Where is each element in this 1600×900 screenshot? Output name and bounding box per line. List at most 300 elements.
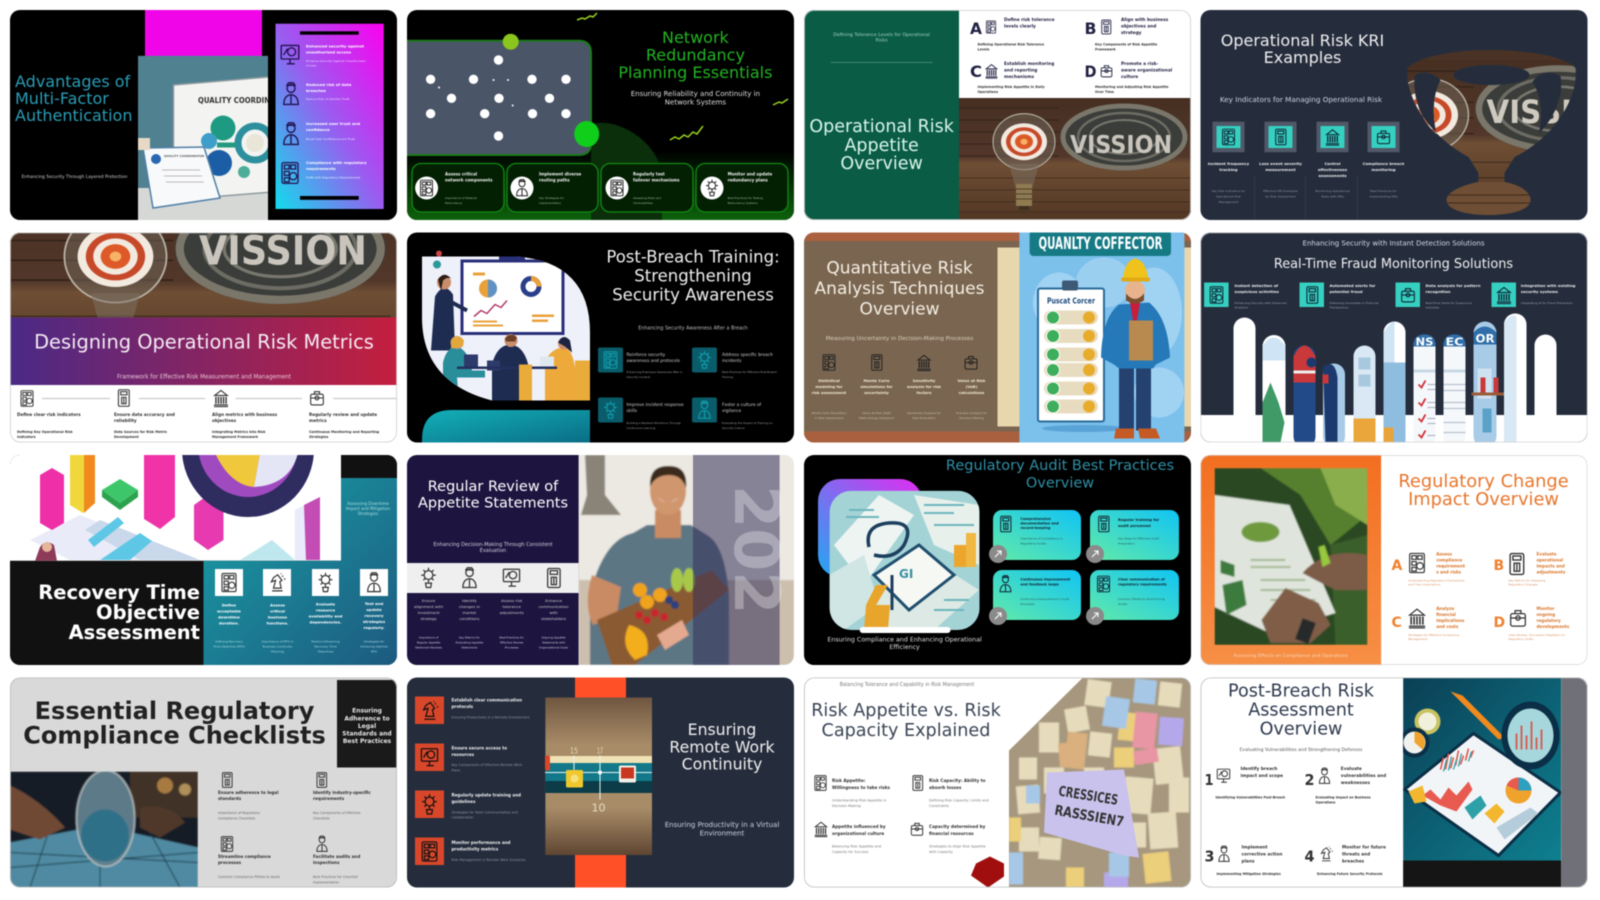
feature 2: potential fraud xyxy=(1330,289,1363,294)
statement 1: Statement Reviews xyxy=(415,646,443,650)
technique 1: risk assessment xyxy=(812,390,846,395)
metric 2: Development xyxy=(114,435,139,439)
technique 3: Sensitivity xyxy=(913,378,936,383)
indicator: incident frequency xyxy=(1208,122,1250,204)
gradient list panel xyxy=(276,24,384,209)
title: Post-Breach Risk xyxy=(1228,682,1375,702)
statement 3: Processes xyxy=(505,646,519,650)
step: test: Vulnerabilities xyxy=(633,201,653,205)
step: test: Assessing Risks and xyxy=(633,196,661,200)
step 2: 2 xyxy=(1304,771,1314,789)
impact C: implications xyxy=(1436,618,1465,623)
step 1: acceptable xyxy=(217,608,241,614)
orange bands xyxy=(804,232,1191,442)
step 4: regularly. xyxy=(364,625,385,630)
title band: Framework for Effective Risk Measurement and Management xyxy=(117,374,292,380)
white caption bar xyxy=(860,627,950,633)
note: lavender sign: RASSSIEN7 xyxy=(1053,803,1125,831)
point 4: vigilance xyxy=(722,408,742,414)
check 2: Identify industry-specific xyxy=(313,790,371,795)
item: compliance: Compliance with regulatory xyxy=(306,160,367,165)
title: Analysis Techniques xyxy=(815,279,985,299)
impact B: Regulatory Changes xyxy=(1508,582,1538,586)
concept 1: Risk Appetite: xyxy=(832,778,866,783)
illustration: team meeting xyxy=(422,250,590,400)
indicator: loss event xyxy=(1259,122,1302,198)
item: increased trust: Boost User Confidence and Trust xyxy=(306,137,356,141)
subtitle: Enhancing Decision-Making Through Consistent xyxy=(433,542,553,548)
impact B: operational xyxy=(1536,558,1564,562)
title: Planning Essentials xyxy=(618,63,772,82)
step 3: dependencies. xyxy=(310,620,342,624)
feature 4: Integration with existing xyxy=(1521,283,1576,288)
step 1: Identify breach xyxy=(1240,766,1277,772)
illustration: isometric bars xyxy=(10,381,341,561)
metric 3: Align metrics with business xyxy=(212,412,278,417)
practice 2: Regular training for xyxy=(1118,518,1159,522)
item C: Implementing Risk Appetite in Daily xyxy=(978,85,1045,89)
feature 3: Activities xyxy=(1426,306,1440,310)
step 3: 3 xyxy=(1204,848,1214,866)
subtitle: Evaluation xyxy=(480,548,506,554)
green node xyxy=(574,121,599,147)
impact A: A xyxy=(1392,558,1402,574)
title: Real-Time Fraud Monitoring Solutions xyxy=(1274,257,1513,272)
impact D: Case Studies: Successful Adaptation to xyxy=(1508,633,1565,637)
step: implement xyxy=(507,164,598,212)
orange panel xyxy=(1200,455,1381,665)
practice 2: audit personnel xyxy=(1118,524,1151,528)
metric 4 xyxy=(309,392,380,439)
concept 1 xyxy=(815,776,891,808)
title: Assessment xyxy=(1248,700,1354,720)
practice 3 xyxy=(993,570,1081,620)
feature 4: Integrating AI for Fraud Prevention xyxy=(1521,301,1573,305)
impact D: regulatory xyxy=(1536,618,1561,623)
item: compliance xyxy=(282,160,367,183)
concept 4: Strategies to Align Risk Appetite xyxy=(929,844,986,848)
step: assess: Assess critical xyxy=(445,172,478,176)
technique 2: Methodology Explained xyxy=(859,416,894,420)
step 3: Implement xyxy=(1242,844,1268,850)
impact A: Assess xyxy=(1436,552,1452,556)
practice 3: and feedback loops xyxy=(1020,582,1059,586)
concept 2: Constraints xyxy=(929,804,949,808)
check 4 xyxy=(313,836,360,884)
step: assess: Redundancy xyxy=(445,201,463,205)
subtitle: Environment xyxy=(700,830,745,838)
metric 3 xyxy=(212,390,278,439)
subtitle: Key Indicators for Managing Operational Risk xyxy=(1220,95,1383,104)
concept 3: Balancing Risk Appetite and xyxy=(832,844,881,848)
impact C: and costs xyxy=(1436,624,1459,629)
impact B xyxy=(1494,552,1566,586)
point 3: Building a Resilient Workforce Through xyxy=(626,421,681,425)
subtitle: Ensuring Reliability and Continuity in xyxy=(631,90,760,98)
slide: Post-Breach Training xyxy=(407,232,794,442)
title: Network xyxy=(662,28,730,47)
metric 2 xyxy=(114,390,175,439)
technique 4: (VaR) xyxy=(966,384,978,389)
practice 1 xyxy=(415,696,530,724)
practice 1: Comprehensive xyxy=(1020,517,1052,521)
point 2 xyxy=(692,348,777,379)
statement 2: market xyxy=(462,610,477,615)
practice 3: Regularly update training and xyxy=(452,792,521,798)
statement 2: Identify xyxy=(462,598,477,603)
gray strip xyxy=(1561,678,1588,888)
practice 1: protocols xyxy=(452,704,474,709)
check 1: standards xyxy=(218,796,242,801)
step: test: failover mechanisms xyxy=(633,178,680,182)
step: monitor: Best Practices for Testing xyxy=(728,196,763,200)
item: enhanced security: unauthorized access xyxy=(306,50,352,54)
white floor xyxy=(1200,415,1588,442)
metric 2: reliability xyxy=(114,418,137,423)
slide: Recovery Time Objective Assessment xyxy=(10,381,397,665)
item A: A xyxy=(970,19,983,38)
step 4: breaches xyxy=(1342,858,1365,864)
item A: Levels xyxy=(978,48,989,52)
practice 1: Regulatory Audits xyxy=(1020,542,1047,546)
photo: quality coordination board: QUALITY COORDIN xyxy=(198,96,270,105)
feature 4 xyxy=(1492,282,1576,307)
practice 4: Monitor performance and xyxy=(452,840,511,845)
title: Overview xyxy=(1260,720,1342,740)
point 4: Foster a culture of xyxy=(722,402,762,408)
impact A xyxy=(1392,552,1465,586)
technique 1: modeling for xyxy=(815,384,843,389)
technique 4: calculations xyxy=(959,390,985,395)
indicator: control: effectiveness xyxy=(1318,167,1348,172)
point 4: Security Culture xyxy=(722,426,745,430)
practice 3: Collaboration xyxy=(452,816,473,820)
metric 3: objectives xyxy=(212,418,237,423)
concept 3 xyxy=(815,822,886,854)
illustration: inspector with checklist: Puscat Corcer xyxy=(1047,296,1095,306)
item D: Over Time xyxy=(1095,90,1115,94)
technique 1: Monte Carlo Simulation xyxy=(811,411,847,415)
item D: Promote a risk- xyxy=(1121,61,1159,67)
practice 4 xyxy=(1090,570,1179,620)
step 2: Business Continuity xyxy=(263,644,293,648)
practice 2: Key Components of Effective Remote Work xyxy=(452,763,522,767)
concept 3: Capacity for Success xyxy=(832,850,869,854)
title: Objective xyxy=(96,601,200,624)
feature 1: Enhancing Security with Advanced xyxy=(1234,301,1287,305)
practice 4: Risk Management in Remote Work Scenarios xyxy=(452,858,526,862)
photo: hands holding report xyxy=(1214,468,1368,645)
title: Regulatory Change xyxy=(1398,471,1569,492)
step 4 xyxy=(360,569,388,654)
item B: objectives and xyxy=(1121,24,1156,30)
title: Continuity xyxy=(682,754,762,774)
concept 3: organizational culture xyxy=(832,831,884,836)
statement 1: Importance of xyxy=(419,636,439,640)
indicator: compliance: Compliance breach xyxy=(1363,161,1405,166)
statement 1: strategy xyxy=(420,616,437,621)
slide: Post-Breach Risk Assessment Overview xyxy=(1200,678,1588,888)
indicator: loss event: measurement xyxy=(1265,167,1296,172)
technique 1: Statistical xyxy=(818,378,840,383)
step: monitor xyxy=(696,164,788,212)
step 3: Recovery Time xyxy=(314,644,337,648)
title: Security Awareness xyxy=(612,286,774,304)
item: increased trust: Increased user trust and xyxy=(306,121,360,126)
technique 3: analysis for risk xyxy=(907,384,942,389)
slide: Quantitative Risk Analysis Techniques xyxy=(804,230,1191,442)
item: reduced risk: Reduce Risk of Identity Theft xyxy=(306,97,350,101)
practice 4 xyxy=(415,838,526,865)
black subtitle box: Adherence to xyxy=(344,716,390,722)
feature 2 xyxy=(1300,282,1379,310)
indicator: control: Control xyxy=(1324,161,1341,166)
practice 4: regulatory requirements xyxy=(1118,582,1167,586)
photo: quality coordination board xyxy=(138,56,272,220)
indicator: control: Monitoring Operational xyxy=(1315,189,1350,193)
item: enhanced security: Access xyxy=(306,64,317,68)
item: reduced risk: Reduced risk of data xyxy=(306,82,352,87)
impact A: Understanding Regulatory Frameworks xyxy=(1408,578,1465,582)
point 1: Security Incident xyxy=(626,375,651,379)
statement 1: Regular Appetite xyxy=(417,640,441,644)
step 1: impact and scope xyxy=(1240,773,1283,779)
concept 2: Risk Capacity: Ability to xyxy=(929,778,986,783)
technique 2: Monte Carlo xyxy=(864,378,890,383)
trophy photo xyxy=(1407,50,1576,216)
feature 2: Automated alerts for xyxy=(1330,283,1376,288)
point 2: incidents xyxy=(722,358,742,364)
cream panel xyxy=(998,248,1191,426)
metric 1: Defining Key Operational Risk xyxy=(17,430,73,434)
impact D: Monitor xyxy=(1536,606,1554,611)
step 3: resource xyxy=(316,608,335,612)
step 1 xyxy=(212,569,245,648)
item D: Monitoring and Adjusting Risk Appetite xyxy=(1095,85,1169,89)
concept 2 xyxy=(913,776,989,808)
step 4: update xyxy=(366,607,382,612)
slide: Network Redundancy Planning Essentials xyxy=(403,10,794,220)
subtitle: Network Systems xyxy=(665,98,726,106)
title band: Designing Operational Risk Metrics xyxy=(34,330,374,354)
impact A: and Their Implications xyxy=(1408,582,1441,586)
technique 2 xyxy=(859,355,894,420)
item: increased trust xyxy=(284,121,360,144)
step 1: 1 xyxy=(1204,771,1214,789)
point 3 xyxy=(598,398,684,430)
indicator: incident frequency: Key Risk Indicators for xyxy=(1212,189,1246,193)
step 2: functions. xyxy=(267,620,289,626)
title: Impact Overview xyxy=(1408,489,1559,510)
statement 4: communication xyxy=(539,604,569,609)
statement 3: tolerance xyxy=(503,604,521,609)
point 3: Continuous Learning xyxy=(626,426,656,430)
photo: vision banner: VISSION xyxy=(199,228,367,274)
statement 3: Effective Review xyxy=(500,640,524,644)
technique 3: Sensitivity Analysis for xyxy=(907,411,942,415)
step 1: Time Objective (RTO) xyxy=(212,644,245,648)
indicator: incident frequency: tracking xyxy=(1219,167,1238,172)
concept 4: financial resources xyxy=(929,831,974,836)
step: monitor: Redundancy Systems xyxy=(728,201,758,205)
check 1: Compliance Checklists xyxy=(218,816,255,820)
step 2: Operations xyxy=(1316,800,1335,804)
practice 2 xyxy=(1090,510,1179,560)
feature 2: Detecting Anomalies in Financial xyxy=(1330,301,1379,305)
concept 2: absorb losses xyxy=(929,785,962,790)
impact D: D xyxy=(1494,615,1505,631)
item B: strategy xyxy=(1121,30,1142,36)
title: Overview xyxy=(1026,476,1094,492)
magenta block xyxy=(145,10,262,56)
statement 1: Ensure xyxy=(422,598,436,603)
subtitle: Enhancing Security with Instant Detection Solutions xyxy=(1303,240,1485,248)
concept 1: Understanding Risk Appetite in xyxy=(832,798,886,802)
concept 1: Decision-Making xyxy=(832,804,861,808)
step 1: Defining Recovery xyxy=(215,640,243,644)
subtitle: Evaluating Vulnerabilities and Strengthening Defenses xyxy=(1240,747,1363,753)
step: implement: routing paths xyxy=(539,178,570,182)
statement 1 xyxy=(414,598,444,650)
check 2: Key Components of Effective xyxy=(313,811,361,815)
impact C: Management xyxy=(1408,637,1428,641)
step 2: weaknesses xyxy=(1341,780,1370,786)
check 3: Common Compliance Pitfalls to Avoid xyxy=(218,875,280,879)
item A: Defining Operational Risk Tolerance xyxy=(978,42,1045,46)
subtitle: Measuring Uncertainty in Decision-Making Processes xyxy=(826,336,973,342)
indicator: incident frequency: Operational Risk xyxy=(1216,194,1241,198)
step 1: duration. xyxy=(219,620,240,626)
step 2: business xyxy=(268,614,288,620)
point 3: Improve incident response xyxy=(626,402,684,408)
impact C: Strategies for Effective Compliance xyxy=(1408,633,1460,637)
black subtitle box: Best Practices xyxy=(343,738,392,745)
statement 2: Evaluating Appetite xyxy=(456,640,483,644)
technique 4: Decision Making xyxy=(959,416,984,420)
practice 1: documentation and xyxy=(1020,522,1059,526)
feature 3: Data analysis for pattern xyxy=(1426,283,1481,288)
check 3: processes xyxy=(218,860,242,865)
practice 1: Ensuring Productivity in a Remote Environment xyxy=(452,716,530,720)
technique 4: Value at Risk xyxy=(958,378,986,383)
impact A: requirement xyxy=(1436,564,1465,568)
check 1 xyxy=(218,773,279,820)
black subtitle box xyxy=(337,680,397,768)
slide: Operational Risk Appetite Overview xyxy=(804,10,1201,228)
title: Appetite xyxy=(844,136,919,156)
statement 4 xyxy=(539,598,569,650)
metric 1 xyxy=(17,391,81,439)
photo: vision banner xyxy=(0,119,407,399)
check 2 xyxy=(313,773,371,820)
practice 2: Key Steps for Effective Audit xyxy=(1118,536,1160,540)
photo: timeline on wood xyxy=(545,698,652,855)
item B: Align with business xyxy=(1121,17,1169,23)
title: Assessment xyxy=(68,621,200,644)
step 2: vulnerabilities and xyxy=(1341,773,1386,779)
metric 1: Indicators xyxy=(17,435,36,439)
point 1 xyxy=(598,348,682,379)
indicator: incident frequency: Incident frequency xyxy=(1208,161,1250,166)
practice 4: productivity metrics xyxy=(452,846,499,852)
pillar illustration: NS xyxy=(1416,336,1434,348)
item: compliance: Fulfill with Regulatory Requirements xyxy=(306,176,361,180)
practice 4: Common Pitfalls to Avoid During xyxy=(1118,597,1165,601)
item: reduced risk xyxy=(284,82,352,104)
title: Strengthening xyxy=(634,266,752,286)
title: Regulatory Audit Best Practices xyxy=(946,458,1174,474)
title: Multi-Factor xyxy=(15,89,109,108)
item C: and reporting xyxy=(1004,68,1037,74)
practice 3: Processes xyxy=(1020,602,1035,606)
concept 2: Defining Risk Capacity: Limits and xyxy=(929,798,989,802)
check 1: Ensure adherence to legal xyxy=(218,790,279,795)
metric 4: Strategies xyxy=(309,435,328,439)
technique 2: Value at Risk (VaR) xyxy=(862,411,891,415)
title: Post-Breach Training: xyxy=(606,248,780,266)
practice 1: Establish clear communication xyxy=(452,698,522,702)
point 2: Best Practices for Effective Post-Breach xyxy=(722,370,777,374)
concept 4: Capacity determined by xyxy=(929,824,986,829)
point 1: Reinforce security xyxy=(626,352,666,358)
step: test: Regularly test xyxy=(633,172,665,176)
impact D xyxy=(1494,606,1570,641)
practice 3: Continuous Improvement in Audit xyxy=(1020,597,1070,601)
step: implement: Implementation xyxy=(539,201,561,205)
impact D: ongoing xyxy=(1536,612,1555,617)
title: Operational Risk xyxy=(809,117,955,137)
title band xyxy=(10,318,397,385)
step 4: 4 xyxy=(1304,848,1314,866)
practice 3 xyxy=(415,790,521,820)
photo: magnifying glass xyxy=(10,770,198,888)
concept 4 xyxy=(911,823,986,854)
indicator: loss event: Loss event severity xyxy=(1259,161,1302,166)
subtitle: Ensuring Productivity in a Virtual xyxy=(665,821,779,829)
step: implement: Implement diverse xyxy=(539,172,582,176)
item D: aware organizational xyxy=(1121,68,1173,74)
statement 2: conditions xyxy=(459,616,479,621)
concept 3: Appetite influenced by xyxy=(832,824,886,829)
item: increased trust: confidence xyxy=(306,127,330,132)
illustration: audit documents xyxy=(829,491,980,630)
check 3: Streamline compliance xyxy=(218,854,271,859)
item A: Define risk tolerance xyxy=(1004,17,1055,23)
step 2: Assess xyxy=(270,602,286,608)
practice 2: Ensure secure access to xyxy=(452,746,507,750)
subtitle: Efficiency xyxy=(889,644,920,651)
navy side panel xyxy=(407,455,579,665)
lime node xyxy=(503,34,519,50)
feature 2: Transactions xyxy=(1328,306,1349,310)
point 4: Evaluating the Impact of Training on xyxy=(722,421,773,425)
indicator: compliance: Implementing KRIs xyxy=(1369,194,1398,198)
step 2: Planning xyxy=(271,650,284,654)
step 3: Objectives xyxy=(318,650,334,654)
impact B: adjustments xyxy=(1536,570,1566,574)
subtitle: Enhancing Security Awareness After a Breach xyxy=(638,326,748,332)
indicator: compliance: Best Practices for xyxy=(1370,189,1397,193)
step 4: strategies xyxy=(363,619,386,624)
slide: Essential Regulatory Compliance Checklists xyxy=(10,678,397,888)
feature 4: security systems xyxy=(1521,289,1559,294)
practice 3: Strategies for Team Communication and xyxy=(452,810,518,814)
statement 2: Statements xyxy=(461,646,478,650)
item C: mechanisms xyxy=(1004,74,1034,80)
indicator: loss event: for Risk Assessment xyxy=(1265,194,1296,198)
impact B: B xyxy=(1494,558,1504,574)
practice 3: guidelines xyxy=(452,799,476,804)
